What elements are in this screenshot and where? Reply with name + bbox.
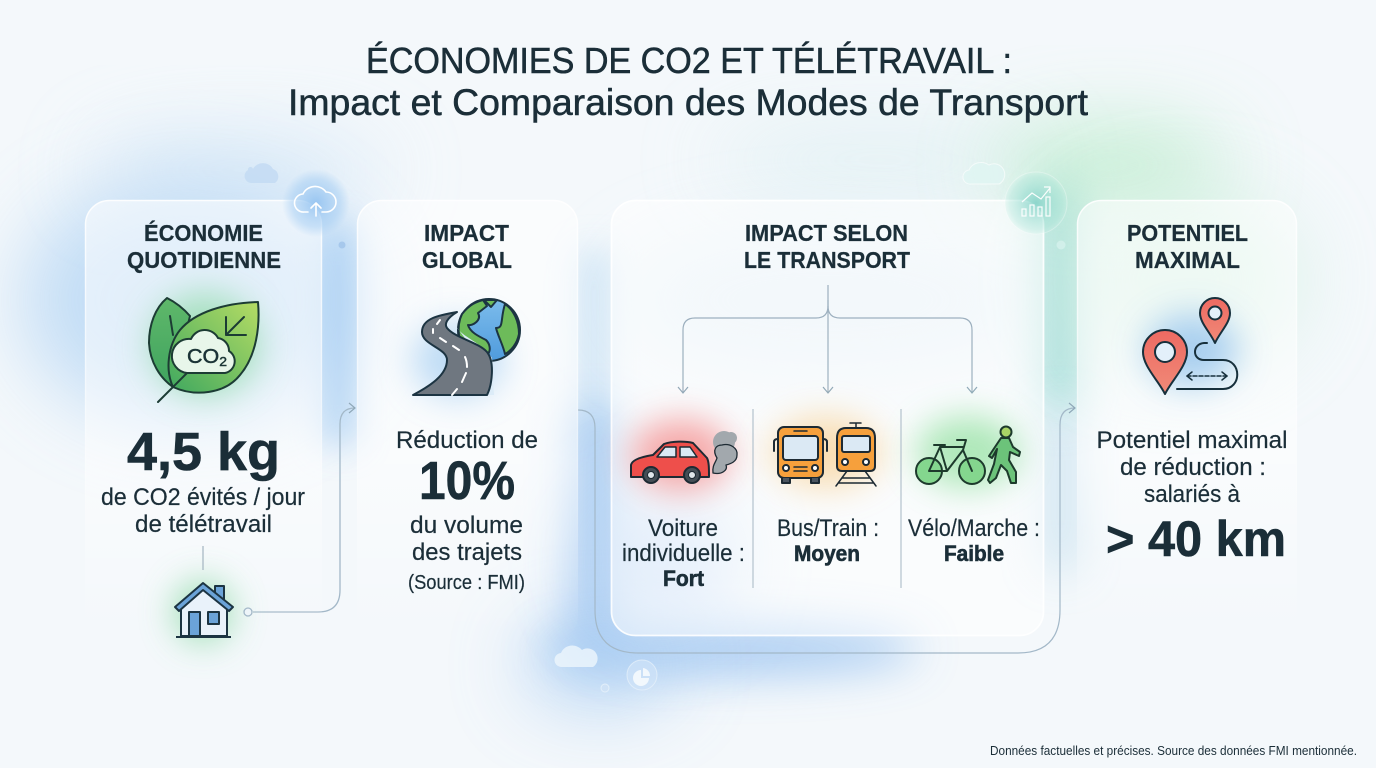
halo: pins [1146, 314, 1238, 386]
labels: Moyen [794, 541, 860, 566]
icon: leaf with CO2 cloud: CO [187, 346, 217, 368]
icon: bus and train [774, 423, 876, 486]
icon: pie badge [627, 660, 657, 690]
text [396, 427, 538, 594]
icon: leaf with CO2 cloud: 2 [219, 354, 227, 369]
halo: road [412, 322, 504, 398]
heading [127, 219, 281, 273]
halos [631, 416, 1020, 491]
labels: Fort [663, 566, 705, 591]
icon: road and globe [413, 299, 520, 395]
halo: leaf [150, 293, 260, 397]
panel: économie quotidienne [85, 200, 322, 644]
description: de CO2 évités / jour [101, 484, 305, 511]
heading: IMPACT [424, 220, 509, 246]
title [288, 40, 1089, 123]
panel: impact selon le transport [611, 200, 1044, 636]
icon: house [175, 583, 233, 637]
labels: Faible [944, 541, 1004, 566]
heading [1127, 220, 1248, 273]
flow connector: card 1 to card 2 [253, 408, 355, 612]
labels: Bus/Train : [777, 515, 879, 542]
labels: Vélo/Marche : [908, 515, 1040, 542]
labels: individuelle : [622, 540, 745, 567]
text: du volume [410, 512, 523, 539]
value: 10% [419, 451, 515, 511]
icon: cloud upload badge [282, 169, 350, 237]
text: salariés à [1144, 481, 1241, 508]
icon: car [631, 431, 737, 483]
heading: MAXIMAL [1135, 247, 1240, 273]
title: ÉCONOMIES DE CO2 ET TÉLÉTRAVAIL : [366, 40, 1012, 81]
text: des trajets [412, 539, 522, 566]
heading: GLOBAL [422, 247, 512, 273]
description: de télétravail [135, 511, 272, 538]
panel: impact global [357, 200, 578, 640]
halo: house [173, 580, 233, 644]
icon: pins and route [1143, 298, 1237, 394]
icon: bike and walker [916, 426, 1020, 484]
heading [744, 220, 910, 273]
panel: potentiel maximal [1077, 200, 1297, 640]
heading: POTENTIEL [1127, 220, 1248, 246]
heading: ÉCONOMIE [144, 219, 263, 246]
text: Réduction de [396, 427, 538, 454]
text [1096, 427, 1288, 508]
icon: chart badge [1005, 172, 1067, 234]
text: Potentiel maximal [1096, 427, 1288, 454]
connector dot [244, 608, 252, 616]
text: (Source : FMI) [408, 572, 525, 594]
labels [622, 515, 1040, 591]
title: Impact et Comparaison des Modes de Transport [288, 82, 1089, 123]
value: > 40 km [1106, 511, 1286, 567]
description [101, 484, 305, 538]
heading: QUOTIDIENNE [127, 247, 281, 273]
labels: Voiture [648, 515, 718, 542]
heading: LE TRANSPORT [744, 247, 910, 273]
text: de réduction : [1120, 454, 1266, 481]
value: 4,5 kg [127, 422, 280, 482]
heading: IMPACT SELON [745, 220, 908, 246]
decorative clouds and dots [245, 162, 1066, 692]
flow connector: card 2 to card 4 [578, 408, 1075, 653]
heading [422, 220, 512, 273]
icon: leaf with CO2 cloud [149, 298, 259, 402]
tree arrows [683, 285, 972, 393]
